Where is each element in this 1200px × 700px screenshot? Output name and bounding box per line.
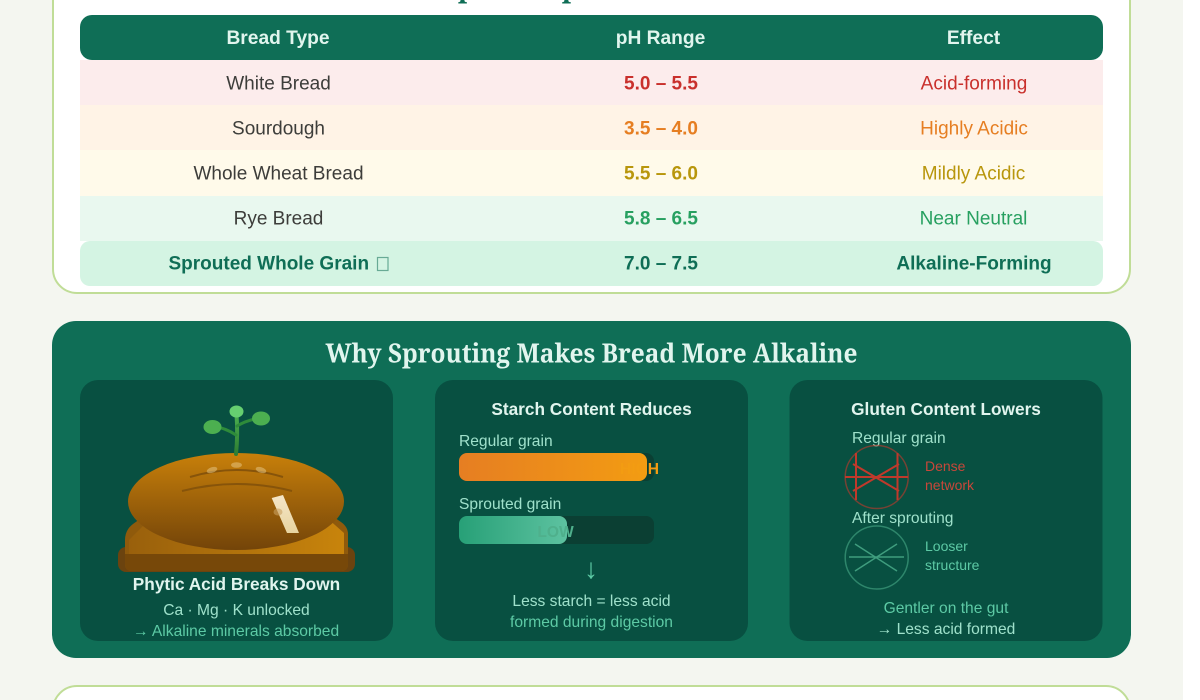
card: starch — [435, 380, 748, 641]
card text: Ca · Mg · K unlocked — [163, 602, 310, 619]
row: Rye Bread: Near Neutral — [920, 208, 1027, 230]
card text — [136, 604, 338, 636]
row: Rye Bread — [80, 196, 1103, 241]
card text: Gentler on the gut — [884, 600, 1009, 617]
card text: formed during digestion — [510, 614, 673, 631]
panel: next section (clipped) — [53, 686, 1130, 700]
row: Whole Wheat Bread: Mildly Acidic — [922, 164, 1025, 184]
row: Whole Wheat Bread: 5.5 – 6.0 — [624, 164, 698, 184]
label: dense network: Dense — [925, 458, 966, 474]
bar: regular grain: Regular grain — [459, 433, 553, 450]
label: regular grain: Regular grain — [852, 430, 946, 447]
bar: sprouted grain: Sprouted grain — [459, 496, 561, 513]
row: Whole Wheat Bread — [80, 150, 1103, 196]
row: White Bread: Acid-forming — [921, 74, 1027, 94]
row: Sprouted Whole Grain: Sprouted Whole Grain — [168, 254, 369, 274]
panel: why sprouting — [52, 321, 1131, 658]
row: White Bread: White Bread — [226, 74, 331, 94]
row: Sourdough: Sourdough — [232, 118, 325, 140]
row: Sprouted Whole Grain — [80, 241, 1103, 286]
row: Sprouted Whole Grain: Alkaline-Forming — [896, 254, 1052, 274]
label: looser structure: structure — [925, 557, 980, 573]
card text: → Less acid formed — [877, 621, 1015, 638]
heading: Why Sprouting Makes Bread More Alkaline — [326, 334, 858, 370]
row: White Bread — [80, 60, 1103, 105]
label: after sprouting: After sprouting — [852, 510, 953, 527]
diagram: loose gluten structure — [845, 526, 908, 589]
label: looser structure: Looser — [925, 538, 968, 554]
bar: sprouted grain: LOW — [537, 524, 574, 541]
row: Sourdough: 3.5 – 4.0 — [624, 118, 698, 140]
card text: Less starch = less acid — [512, 593, 671, 610]
card text — [877, 600, 1015, 638]
table header: Bread Type — [226, 28, 330, 49]
bar: sprouted grain — [459, 496, 654, 544]
row: Rye Bread: 5.8 – 6.5 — [624, 208, 698, 230]
table header — [80, 15, 1103, 60]
row: Sprouted Whole Grain: 7.0 – 7.5 — [624, 254, 698, 274]
table header: Effect — [947, 28, 1001, 49]
card text: → Alkaline minerals absorbed — [133, 623, 339, 640]
card title: Phytic Acid Breaks Down — [133, 574, 340, 594]
arrow: down: ↓ — [584, 553, 598, 584]
card: gluten — [790, 380, 1102, 641]
bar: regular grain: HIGH — [620, 461, 659, 478]
card: phytic acid — [80, 380, 393, 641]
card title: Gluten Content Lowers — [851, 399, 1041, 419]
panel: pH comparison table — [53, 0, 1130, 293]
row: Sourdough — [80, 105, 1103, 150]
row: Whole Wheat Bread: Whole Wheat Bread — [193, 164, 364, 184]
card title: Starch Content Reduces — [491, 399, 692, 419]
row: Sourdough: Highly Acidic — [920, 118, 1028, 140]
bar: regular grain — [459, 433, 659, 481]
row: Rye Bread: Rye Bread — [234, 208, 323, 230]
label: dense network: network — [925, 477, 975, 493]
label: dense network — [925, 458, 975, 493]
label: looser structure — [925, 538, 980, 573]
diagram: dense gluten network — [845, 446, 908, 508]
table header: pH Range — [616, 28, 706, 49]
row: White Bread: 5.0 – 5.5 — [624, 74, 698, 94]
card text — [510, 593, 673, 631]
icon: sprouted bread loaf — [118, 406, 355, 572]
